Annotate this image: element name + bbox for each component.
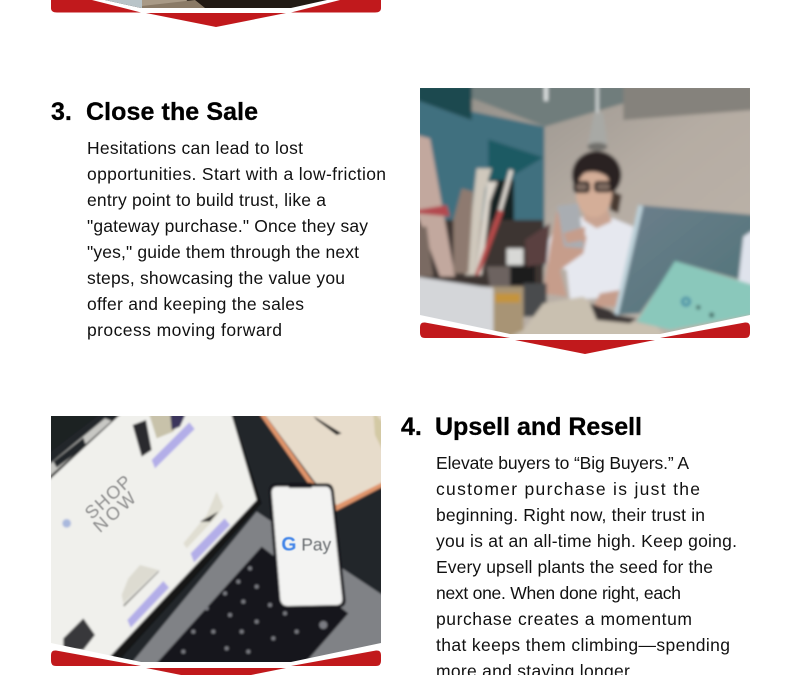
section 4 body text: purchase creates a momentum — [436, 609, 692, 629]
shirt — [537, 217, 633, 300]
laptop — [615, 205, 753, 315]
screen product images — [133, 420, 152, 457]
section 4 body text — [436, 453, 737, 675]
glasses — [573, 181, 590, 193]
Google Pay logo: G — [281, 534, 296, 555]
brush cup — [420, 274, 496, 331]
photo banner: top section remnant — [51, 0, 381, 27]
keys — [181, 566, 327, 654]
section 3 body text: opportunities. Start with a low-friction — [87, 164, 386, 184]
section 3 heading: 3. — [51, 98, 72, 126]
laptop screen — [47, 412, 257, 658]
phone — [557, 203, 584, 248]
section 3 body text: steps, showcasing the value you — [87, 268, 345, 288]
section 3 body text: "yes," guide them through the next — [87, 242, 359, 262]
section 3 body text: offer and keeping the sales — [87, 294, 304, 314]
green folder — [637, 261, 753, 330]
photo: woman with phone at laptop — [417, 85, 753, 354]
Google Pay logo: Pay — [301, 534, 332, 554]
brushes — [417, 135, 455, 277]
section 3 body text: process moving forward — [87, 320, 282, 340]
section 4 body text: Elevate buyers to “Big Buyers.” A — [436, 453, 689, 473]
Google Pay logo — [281, 534, 332, 555]
photo: laptop shop and Google Pay phone — [47, 412, 385, 675]
neck and face — [583, 207, 612, 228]
sneakers — [183, 492, 223, 548]
woman hair — [572, 151, 621, 199]
section 3 body text: "gateway purchase." Once they say — [87, 216, 368, 236]
section 4 body text: customer purchase is just the — [436, 479, 700, 499]
section 4 body text: you is at an all-time high. Keep going. — [436, 531, 737, 551]
section 4 heading: 4. — [401, 413, 422, 441]
laptop base — [130, 512, 385, 665]
purple buttons — [152, 422, 195, 468]
section 4 body text: that keeps them climbing—spending — [436, 635, 730, 655]
section 4 heading: Upsell and Resell — [435, 413, 642, 441]
section 3 heading: Close the Sale — [86, 98, 258, 126]
notebook — [263, 412, 385, 507]
table clutter — [507, 248, 523, 265]
section 3 body text — [87, 138, 386, 340]
shop now label: SHOP — [81, 471, 135, 523]
section 3 body text: entry point to build trust, like a — [87, 190, 326, 210]
arm and hand — [543, 212, 587, 297]
laptop screen bezel — [47, 412, 103, 455]
section 4 body text: next one. When done right, each — [436, 583, 681, 603]
section 4 body text: beginning. Right now, their trust in — [436, 505, 705, 525]
section 4 body text: Every upsell plants the seed for the — [436, 557, 713, 577]
phone — [269, 483, 346, 609]
shop now label: NOW — [89, 488, 140, 536]
section 3 body text: Hesitations can lead to lost — [87, 138, 303, 158]
